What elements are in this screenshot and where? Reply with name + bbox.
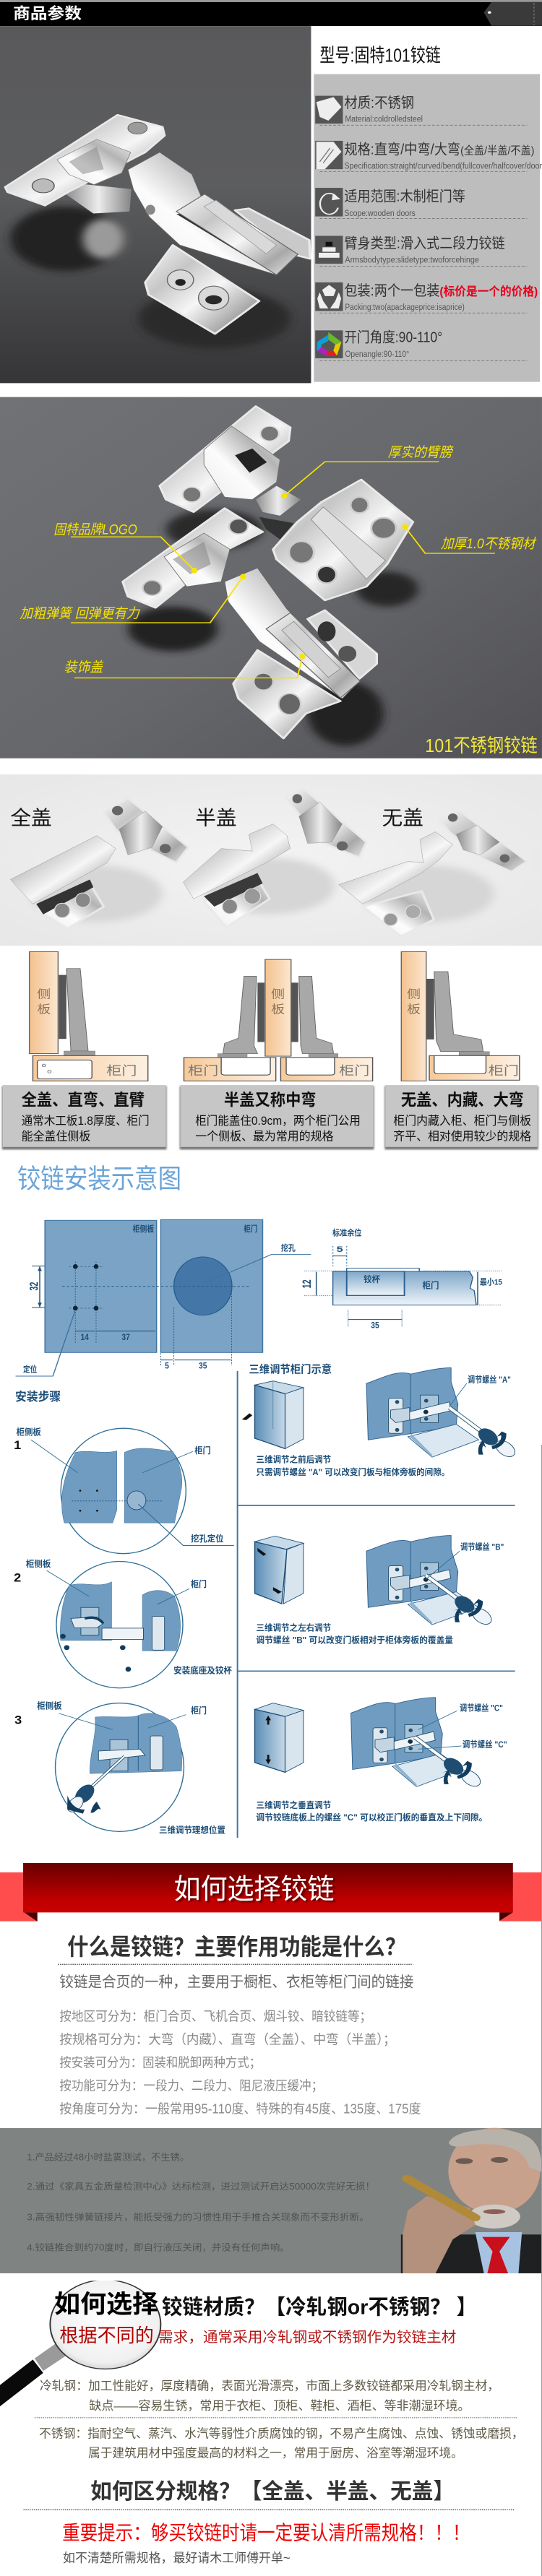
step 2: 2 bbox=[14, 1571, 21, 1585]
icon: leather tag bbox=[484, 2, 542, 26]
adjustment: left and right: 三维调节之左右调节 bbox=[256, 1622, 331, 1633]
model title: 型号:固特101铰链 bbox=[319, 44, 441, 66]
diagram: standard margin: 12 bbox=[300, 1279, 313, 1288]
caption box: half cover: 柜门能盖住0.9cm，两个柜门公用 bbox=[195, 1115, 361, 1128]
panel: quality points: 4.铰链推合到约70度时，即自行液压关闭，并没有任何声响。 bbox=[27, 2242, 290, 2253]
adjustment: front and back: 调节螺丝 "A" bbox=[468, 1374, 511, 1385]
text: classifications: 按功能可分为：一段力、二段力、阻尼液压缓冲； bbox=[59, 2078, 323, 2093]
step 1: 挖孔定位 bbox=[191, 1534, 224, 1544]
note text: 如不清楚所需规格，最好请木工师傅开单~ bbox=[63, 2551, 291, 2565]
step 3 bbox=[14, 1700, 225, 1835]
diagram: standard margin: 柜门 bbox=[422, 1280, 439, 1291]
diagram: half cover section: 柜门 bbox=[188, 1064, 218, 1078]
panel: quality points: 2.通过《家具五金质量检测中心》达标检测，进过测试开启达50000次完好无损！ bbox=[27, 2182, 375, 2192]
row: scope: Scope:wooden doors bbox=[344, 208, 416, 218]
heading: install steps: 安装步骤 bbox=[15, 1390, 61, 1404]
panel: quality points bbox=[0, 2128, 542, 2273]
subheading: material: 根据不同的 bbox=[59, 2325, 154, 2346]
product photo: hinge bbox=[0, 26, 311, 383]
right edge rule bbox=[541, 1445, 542, 2576]
caption box: half cover bbox=[180, 1085, 374, 1149]
diagram: full cover section: 板 bbox=[37, 1003, 51, 1016]
diagram: side panel drilling: 37 bbox=[121, 1333, 130, 1342]
callout: decorative cover bbox=[64, 654, 306, 678]
diagram: door drilling: 35 bbox=[199, 1362, 207, 1371]
diagram: no cover section: 侧 bbox=[407, 987, 421, 1000]
row: material bbox=[315, 95, 527, 125]
row: packing: Packing:two(apackageprice:isaprice) bbox=[345, 302, 465, 312]
photo: three hinge types bbox=[0, 774, 542, 946]
row: specification: 规格:直弯/中弯/大弯 bbox=[344, 142, 460, 157]
diagram: full cover section bbox=[30, 951, 148, 1081]
diagram: no cover section bbox=[401, 951, 520, 1081]
text: classifications bbox=[59, 2008, 421, 2117]
heading: material choice: 如何选择 bbox=[54, 2291, 158, 2319]
diagram: full cover section: 侧 bbox=[37, 987, 51, 1000]
panel: quality points: 1.产品经过48小时盐雾测试，不生锈。 bbox=[27, 2152, 189, 2163]
caption box: full cover: 全盖、直弯、直臂 bbox=[22, 1091, 145, 1110]
section: cover types bbox=[0, 774, 542, 1149]
step 2: 柜侧板 bbox=[26, 1558, 51, 1569]
adjustment: front and back bbox=[242, 1367, 518, 1477]
label: full cover: 全盖 bbox=[10, 807, 52, 829]
callout: thick arm bbox=[281, 444, 454, 498]
header bar bbox=[0, 0, 542, 26]
adjustment: vertical: 调节铰链底板上的螺丝 "C" 可以校正门板的垂直及上下间隙。 bbox=[256, 1812, 487, 1823]
header bar: 商品参数 bbox=[13, 5, 82, 22]
diagram: door drilling bbox=[62, 1219, 263, 1371]
label: no cover: 无盖 bbox=[382, 807, 423, 829]
row: packing bbox=[315, 282, 538, 313]
callout: decorative cover: 装饰盖 bbox=[64, 660, 103, 675]
caption box: no cover bbox=[384, 1085, 538, 1149]
caption box: half cover: 半盖又称中弯 bbox=[224, 1091, 317, 1110]
figure: man with cigar bbox=[401, 2128, 542, 2273]
diagram: half cover section bbox=[184, 959, 373, 1081]
banner: 如何选择铰链 bbox=[174, 1874, 335, 1905]
callout: thick steel bbox=[402, 524, 537, 553]
panel: quality points: 3.高强韧性弹簧链接片，能抵受强力的习惯性用于手推合关现象而不变形折断。 bbox=[27, 2212, 369, 2223]
step 1: 柜侧板 bbox=[16, 1427, 41, 1438]
row: arm body bbox=[315, 235, 527, 267]
rule bbox=[238, 1504, 515, 1507]
text: stainless steel bbox=[39, 2427, 524, 2460]
caption box: half cover: 一个侧板、最为常用的规格 bbox=[195, 1130, 334, 1144]
divider column bbox=[236, 1371, 239, 1838]
text: classifications: 按安装可分为：固装和脱卸两种方式； bbox=[59, 2055, 261, 2070]
diagram: side panel drilling bbox=[27, 1220, 157, 1352]
row: opening angle: 开门角度:90-110° bbox=[344, 329, 442, 346]
diagram: full cover section: 柜门 bbox=[106, 1064, 137, 1078]
adjustment: vertical: 三维调节之垂直调节 bbox=[256, 1799, 331, 1810]
diagram: door drilling: 柜门 bbox=[244, 1224, 257, 1233]
diagram: standard margin: 35 bbox=[371, 1321, 379, 1331]
hinge: half cover bbox=[183, 789, 366, 928]
rule bbox=[238, 1669, 515, 1672]
diagram: door drilling: 5 bbox=[165, 1362, 169, 1371]
adjustment: vertical: 调节螺丝 "C" bbox=[460, 1703, 503, 1713]
diagram: half cover section: 柜门 bbox=[339, 1064, 369, 1078]
heading: 3D adjustment: 三维调节柜门示意 bbox=[249, 1363, 332, 1375]
text: classifications: 按地区可分为：柜门合页、飞机合页、烟斗铰、暗铰链等； bbox=[59, 2008, 371, 2023]
adjustment: left and right bbox=[255, 1536, 504, 1645]
section: hinge feature photo bbox=[0, 397, 542, 758]
subheading: material bbox=[59, 2325, 456, 2346]
callout: thick arm: 厚实的臂膀 bbox=[388, 444, 454, 459]
row: opening angle bbox=[315, 329, 527, 360]
label: position: 定位 bbox=[23, 1365, 37, 1374]
step 3: 三维调节理想位置 bbox=[159, 1825, 225, 1835]
step 3: 柜门 bbox=[191, 1705, 207, 1716]
section: product parameters bbox=[0, 0, 542, 383]
photo: three hinges bbox=[0, 397, 542, 758]
row: scope bbox=[315, 188, 527, 218]
step 2: 安装底座及铰杯 bbox=[173, 1665, 232, 1675]
section: material and specification bbox=[0, 2274, 524, 2565]
hinge: no cover bbox=[339, 811, 527, 936]
callout: brand logo bbox=[53, 522, 197, 573]
row: packing: 包装:两个一包装 bbox=[344, 282, 439, 299]
diagram: standard margin: 标准余位 bbox=[332, 1228, 361, 1237]
row: material: 材质:不锈钢 bbox=[344, 95, 414, 111]
step 1: 1 bbox=[14, 1438, 22, 1452]
diagram: standard margin: 5 bbox=[337, 1244, 343, 1253]
callout: brand logo: 固特品牌LOGO bbox=[53, 522, 137, 537]
icon: magnifying glass bbox=[0, 2274, 166, 2406]
adjustment: left and right: 调节螺丝 "B" 可以改变门板相对于柜体旁板的覆盖量 bbox=[256, 1635, 453, 1645]
diagram: side panel drilling: 柜侧板 bbox=[133, 1224, 154, 1233]
diagram: side panel drilling: 32 bbox=[27, 1281, 40, 1291]
diagram: standard margin: 最小15 bbox=[480, 1277, 502, 1287]
section: how to choose bbox=[0, 1863, 542, 2273]
adjustment: left and right: 调节螺丝 "B" bbox=[460, 1542, 504, 1552]
callout: spring bbox=[20, 574, 246, 623]
adjustment: vertical bbox=[255, 1698, 507, 1823]
step 1: 柜门 bbox=[194, 1445, 211, 1456]
callout: spring: 加粗弹簧 回弹更有力 bbox=[20, 605, 140, 621]
banner bbox=[0, 1863, 542, 1922]
adjustment: vertical: 调节螺丝 "C" bbox=[463, 1739, 507, 1750]
diagram: half cover section: 侧 bbox=[271, 987, 285, 1000]
section: install steps and adjustments bbox=[14, 1367, 518, 1838]
diagram: no cover section: 柜门 bbox=[489, 1064, 519, 1078]
heading: material choice bbox=[54, 2291, 477, 2319]
caption box: full cover bbox=[2, 1085, 167, 1149]
caption box: full cover: 能全盖住侧板 bbox=[22, 1130, 90, 1144]
row: scope: 适用范围:木制柜门等 bbox=[344, 189, 465, 204]
row: opening angle: Openangle:90-110° bbox=[345, 349, 409, 359]
diagram: side panel drilling: 14 bbox=[80, 1333, 89, 1342]
diagram: half cover section: 板 bbox=[271, 1003, 285, 1016]
section: installation dimensions bbox=[16, 1164, 502, 1376]
adjustment: front and back: 只需调节螺丝 "A" 可以改变门板与柜体旁板的间隙。 bbox=[256, 1467, 449, 1477]
step 2: 柜门 bbox=[191, 1579, 207, 1589]
diagram: no cover section: 板 bbox=[407, 1003, 421, 1016]
parameters panel bbox=[311, 26, 542, 383]
label: drilled hole: 挖孔 bbox=[281, 1243, 296, 1253]
banner: 如何选择铰链 bbox=[176, 1875, 336, 1906]
hinge: full cover bbox=[10, 798, 189, 928]
diagram: standard margin: 铰杯 bbox=[364, 1274, 380, 1284]
label: drilled hole bbox=[204, 1243, 311, 1284]
text: cold rolled steel bbox=[40, 2380, 499, 2413]
step 3: 3 bbox=[14, 1713, 22, 1726]
label: half cover: 半盖 bbox=[195, 807, 237, 829]
caption box: full cover: 通常木工板1.8厚度、柜门 bbox=[22, 1115, 150, 1128]
step 3: 柜侧板 bbox=[37, 1700, 62, 1711]
heading: installation diagram: 铰链安装示意图 bbox=[17, 1164, 181, 1194]
diagram: standard margin bbox=[300, 1228, 502, 1331]
label: position bbox=[16, 1310, 75, 1376]
step 1 bbox=[14, 1427, 234, 1554]
step 2 bbox=[14, 1558, 232, 1688]
row: specification bbox=[315, 141, 542, 171]
row: material: Material:coldrolledsteel bbox=[345, 114, 423, 124]
adjustment: front and back: 三维调节之前后调节 bbox=[256, 1454, 331, 1464]
